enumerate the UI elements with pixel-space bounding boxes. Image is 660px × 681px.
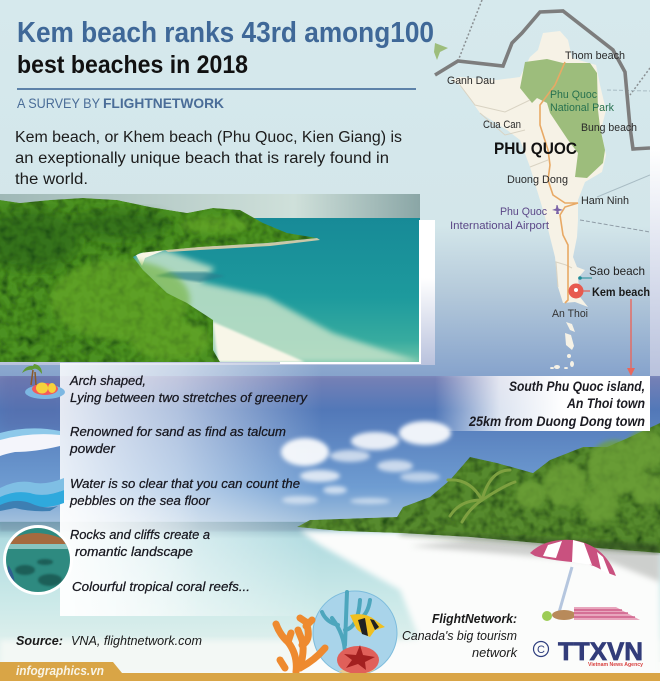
place labels: Bung beach [581,122,637,134]
national park label: Phu Quoc [550,89,597,101]
icon: rock and reef circle [3,525,74,595]
island name: PHU QUOC [494,139,577,158]
FlightNetwork note: Canada's big tourism [402,628,517,643]
list text: powder [69,441,116,456]
maritime boundary [435,11,650,149]
Kem beach marker [568,284,650,299]
clouds [281,421,451,504]
location box: 25km from Duong Dong town [468,414,645,429]
list text: Arch shaped, [69,373,146,388]
list text [69,373,309,594]
national park label: National Park [550,102,614,114]
TTXVN logo: TTXVN [558,638,643,666]
fish [350,614,385,637]
FlightNetwork note [402,611,518,660]
title: Kem beach ranks 43rd among100 [17,17,434,49]
source line: VNA, flightnetwork.com [71,633,202,648]
icon: sand ribbon [0,428,60,456]
coral and fish illustration [276,591,397,676]
teal coral [322,592,370,655]
FlightNetwork note: FlightNetwork: [432,611,517,626]
orange coral [276,618,325,672]
national park [520,59,605,178]
title rule [17,88,416,90]
list text: Lying between two stretches of greenery [70,390,309,405]
intro paragraph: an exeptionally unique beach that is rarely found in [15,150,389,167]
location box: An Thoi town [566,396,645,411]
map of Phu Quoc [434,0,650,376]
main road [540,62,578,303]
intro paragraph: the world. [15,171,88,188]
photo border [280,220,420,363]
subtitle: A SURVEY BY [17,95,101,111]
airport label [450,205,563,232]
Kem beach marker: Kem beach [592,287,650,299]
small island [434,43,448,60]
source line: Source: [16,633,63,648]
place labels: Thom beach [565,50,625,62]
title: best beaches in 2018 [17,51,248,79]
copyright mark: C [537,644,545,656]
footer bar: infographics.vn [16,663,104,678]
subtitle [17,95,224,111]
list text: romantic landscape [75,544,193,559]
palm fronds [448,470,515,522]
icon: water waves [0,478,64,511]
Sao beach marker: Sao beach [589,264,645,278]
location box: South Phu Quoc island, [509,379,645,394]
title [17,17,434,79]
photo: aerial view of Kem beach [0,194,420,362]
list text: Renowned for sand as find as talcum [70,424,286,439]
national park label [550,90,614,111]
list text: Rocks and cliffs create a [70,527,210,542]
footer bar [0,662,660,681]
place labels [447,50,637,207]
place labels: Ham Ninh [581,195,629,207]
right margin strip [650,0,660,376]
palm trees and greenery [297,423,660,553]
arrow to location box [627,299,635,376]
map panel background [0,0,650,376]
small road lines [460,85,572,287]
list text: pebbles on the sea floor [69,493,211,508]
place labels: Duong Dong [507,174,568,186]
place labels: Cua Can [483,119,521,131]
south islets [550,322,575,369]
place labels: Ganh Dau [447,75,495,87]
sea lines [458,0,650,232]
starfish dome [337,645,379,674]
An Thoi label: An Thoi [552,308,588,320]
list text: Water is so clear that you can count the [70,476,300,491]
left white area beside photo [0,220,435,365]
icon: palm tree with float [22,364,65,399]
island [450,31,606,307]
FlightNetwork note: network [472,645,518,660]
location box [435,376,650,431]
copyright mark [534,642,548,656]
intro paragraph [15,129,402,188]
source line [16,633,202,648]
airport label: International Airport [450,220,549,232]
sand [270,531,660,675]
list panel [60,363,322,616]
intro paragraph: Kem beach, or Khem beach (Phu Quoc, Kien Giang) is [15,129,402,146]
subtitle: FLIGHTNETWORK [103,95,224,111]
background photo: sky, sea and beach [0,280,660,675]
list text: Colourful tropical coral reefs... [72,579,250,594]
Sao beach marker [578,266,644,280]
airport label: Phu Quoc [500,206,547,218]
TTXVN logo: Vietnam News Agency [588,662,644,668]
umbrella and towel [530,540,640,621]
